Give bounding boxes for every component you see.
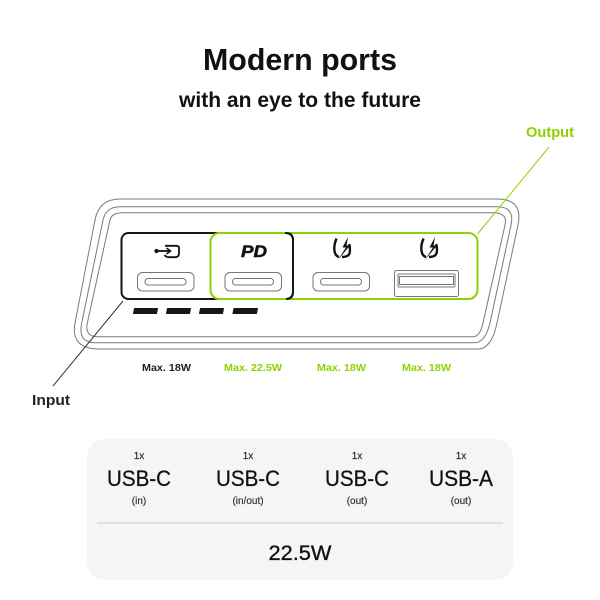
power bank outline: [74, 199, 519, 349]
subtitle: with an eye to the future: [178, 89, 421, 112]
total power: 22.5W: [268, 542, 332, 565]
title: Modern ports: [203, 42, 397, 77]
spec: USB-A out: USB-A: [429, 466, 493, 491]
spec: USB-C in: USB-C: [107, 466, 171, 491]
spec: USB-C in/out: (in/out): [232, 496, 264, 507]
icon: fast charge 1: [334, 237, 350, 260]
spec: USB-C in/out: 1x: [243, 451, 253, 462]
wattage labels: Max. 18W: [402, 362, 451, 374]
spec: USB-C in/out: [216, 451, 280, 507]
output highlight box: [210, 233, 478, 299]
spec: USB-C out: USB-C: [325, 466, 389, 491]
icon: fast charge 2: [421, 237, 437, 260]
port: USB-C input: [138, 272, 194, 291]
spec: USB-C out: [325, 451, 389, 507]
wattage labels: [142, 362, 451, 374]
port: USB-C output: [313, 272, 370, 291]
input highlight box: [122, 233, 293, 299]
port: USB-A output: [394, 270, 458, 296]
output label: Output: [526, 124, 574, 141]
spec: USB-C in: 1x: [134, 451, 144, 462]
spec: USB-C in: [107, 451, 171, 507]
spec: USB-C out: (out): [347, 496, 367, 507]
LED indicators: [134, 308, 258, 314]
spec: USB-A out: 1x: [456, 451, 466, 462]
icon: input arrow: [155, 246, 179, 257]
port: USB-C PD: [225, 272, 282, 291]
input label: Input: [32, 392, 70, 409]
icon: PD: PD: [241, 242, 267, 261]
wattage labels: Max. 22.5W: [224, 362, 282, 374]
spec: USB-C in: (in): [132, 496, 146, 507]
spec: USB-C out: 1x: [352, 451, 362, 462]
input leader line: [53, 301, 123, 386]
black box right edge over green: [285, 233, 293, 299]
spec: USB-A out: [429, 451, 493, 507]
wattage labels: Max. 18W: [142, 362, 191, 374]
output leader line: [478, 147, 549, 234]
wattage labels: Max. 18W: [317, 362, 366, 374]
panel: specifications: [87, 439, 513, 580]
spec: USB-C in/out: USB-C: [216, 466, 280, 491]
spec: USB-A out: (out): [451, 496, 471, 507]
